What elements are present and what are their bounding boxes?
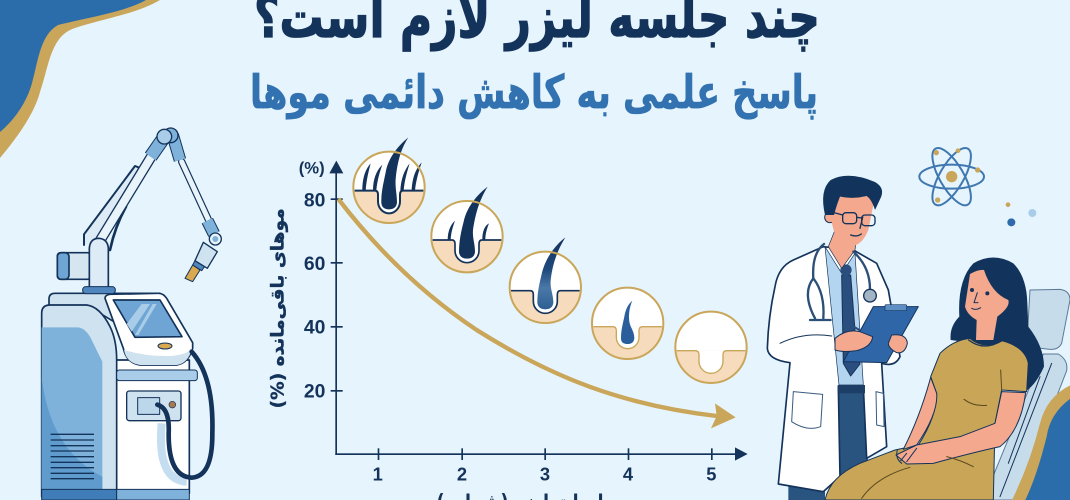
y axis labels: 80 (304, 190, 325, 211)
follicle: session 3 (510, 237, 581, 324)
icon: atom (919, 143, 984, 211)
y axis (329, 161, 343, 455)
subtitle: پاسخ علمی به کاهش دائمی موها (250, 65, 818, 120)
y axis labels: 20 (304, 382, 325, 403)
decorative dots (1006, 202, 1036, 226)
y axis labels: 40 (304, 318, 325, 339)
x axis labels: 3 (540, 463, 550, 484)
icon: laser machine (42, 128, 221, 500)
x axis (335, 447, 748, 461)
people and atom group (767, 143, 1070, 500)
y axis labels: (%) (299, 158, 325, 177)
follicle: session 1 (353, 137, 425, 224)
y axis labels: 60 (304, 254, 325, 275)
illustration: treatment chair (983, 289, 1070, 500)
illustration: doctor (767, 176, 918, 500)
illustration: patient (825, 257, 1044, 500)
x axis labels (373, 463, 716, 484)
x axis labels: 1 (373, 463, 383, 484)
x axis labels: 5 (706, 463, 716, 484)
x axis labels: 2 (457, 463, 467, 484)
decline curve with arrow (338, 199, 736, 428)
chart: hair reduction by session (267, 137, 748, 500)
y axis title: موهای باقی‌مانده (%) (267, 208, 288, 408)
follicle: session 2 (431, 187, 503, 273)
follicle: session 5 (675, 312, 747, 384)
follicle: session 4 (592, 288, 663, 360)
x axis labels: 4 (623, 463, 634, 484)
y axis labels (299, 158, 325, 403)
decorative corner: bottom right (1012, 385, 1070, 500)
decorative corner: top left (0, 0, 160, 158)
